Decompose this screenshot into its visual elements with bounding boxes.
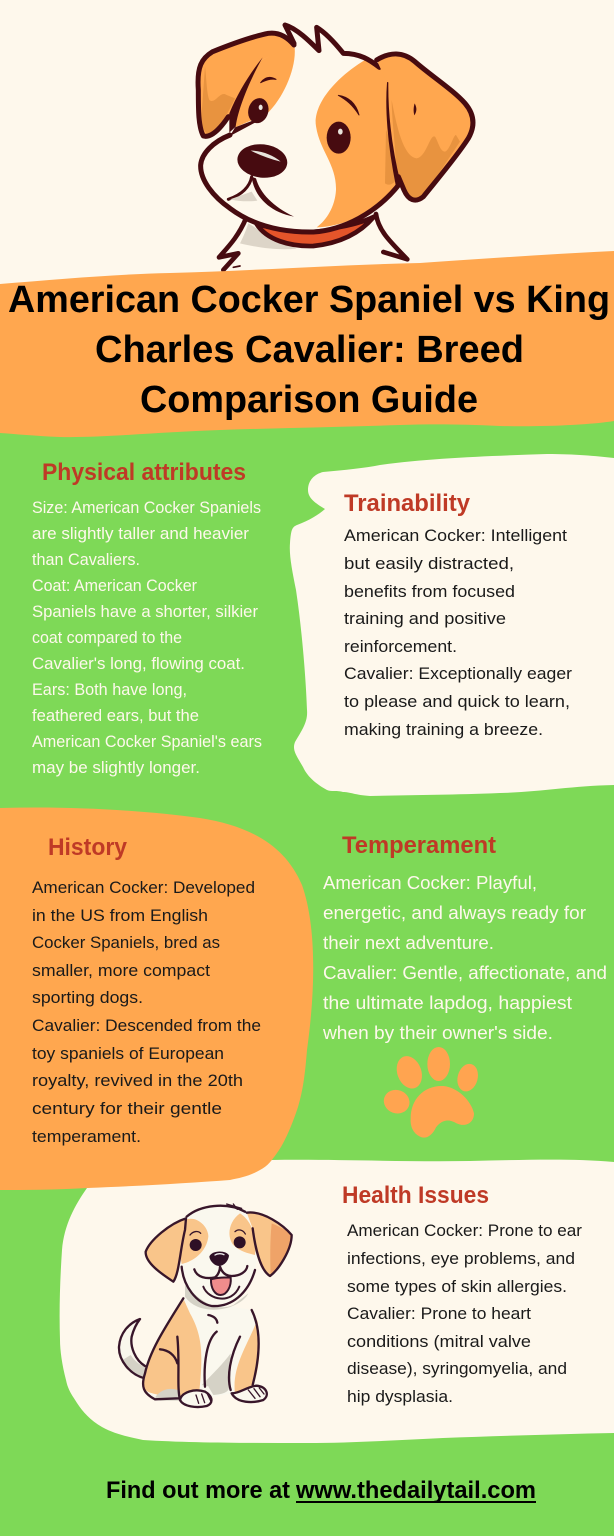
physical attributes text: Size: American Cocker Spaniels	[32, 498, 261, 517]
trainability text: to please and quick to learn,	[344, 692, 570, 711]
footer call to action	[106, 1477, 536, 1504]
puppy right ear	[247, 1212, 292, 1276]
history text: Cavalier: Descended from the	[32, 1016, 261, 1035]
history text: century for their gentle	[32, 1099, 222, 1118]
health issues text: some types of skin allergies.	[347, 1277, 567, 1296]
history blob	[0, 807, 313, 1190]
temperament text: their next adventure.	[323, 932, 494, 953]
dog collar	[257, 217, 374, 246]
health issues text: American Cocker: Prone to ear	[347, 1221, 582, 1240]
dog face patch right	[316, 60, 399, 227]
physical attributes text: may be slightly longer.	[32, 758, 200, 777]
title text	[8, 279, 610, 421]
dog face patch left	[235, 43, 295, 127]
title text: American Cocker Spaniel vs King	[8, 279, 610, 321]
title text: Charles Cavalier: Breed	[95, 329, 524, 371]
panel: history	[0, 807, 313, 1190]
icon: paw print	[380, 1047, 481, 1138]
temperament text: energetic, and always ready for	[323, 902, 586, 923]
trainability text: reinforcement.	[344, 637, 457, 656]
history text: royalty, revived in the 20th	[32, 1071, 243, 1090]
history text: sporting dogs.	[32, 988, 143, 1007]
dog chest and neck	[219, 213, 407, 273]
physical attributes text	[32, 498, 262, 777]
trainability text: making training a breeze.	[344, 720, 543, 739]
puppy face	[190, 1230, 247, 1299]
puppy body	[143, 1298, 267, 1405]
trainability text: benefits from focused	[344, 582, 515, 601]
dog eyebrow and eye right	[327, 95, 359, 154]
physical attributes text: Coat: American Cocker	[32, 576, 197, 595]
orange band shape	[0, 251, 614, 437]
puppy paws	[180, 1386, 267, 1407]
dog right ear	[377, 54, 473, 200]
puppy tail	[119, 1319, 145, 1378]
history text: in the US from English	[32, 906, 208, 925]
health issues text: disease), syringomyelia, and	[347, 1359, 567, 1378]
temperament text: Cavalier: Gentle, affectionate, and	[323, 962, 607, 983]
trainability text: training and positive	[344, 609, 506, 628]
temperament text: American Cocker: Playful,	[323, 872, 537, 893]
puppy left ear	[146, 1218, 186, 1282]
trainability text: Cavalier: Exceptionally eager	[344, 664, 572, 683]
physical attributes text: Spaniels have a shorter, silkier	[32, 602, 258, 621]
heading: trainability: Trainability	[344, 490, 471, 517]
physical attributes text: than Cavaliers.	[32, 550, 140, 569]
history text: Cocker Spaniels, bred as	[32, 933, 220, 952]
heading: temperament: Temperament	[342, 832, 496, 859]
history text: temperament.	[32, 1127, 141, 1146]
panel: health issues	[60, 1160, 614, 1443]
panel: physical attributes	[32, 459, 262, 777]
health issues text: hip dysplasia.	[347, 1387, 453, 1406]
heading: physical attributes: Physical attributes	[42, 459, 246, 486]
history text: American Cocker: Developed	[32, 878, 255, 897]
dog left ear	[198, 33, 294, 136]
health issues text: conditions (mitral valve	[347, 1332, 531, 1351]
temperament text: when by their owner's side.	[322, 1022, 553, 1043]
trainability text	[344, 526, 572, 739]
health issues text	[347, 1221, 582, 1406]
title band	[0, 251, 614, 437]
dog head outline	[201, 25, 400, 232]
illustration: dog head	[198, 25, 473, 273]
dog eye left	[245, 96, 271, 125]
physical attributes text: Cavalier's long, flowing coat.	[32, 654, 245, 673]
history text	[32, 878, 261, 1146]
footer call to action: www.thedailytail.com	[295, 1477, 536, 1504]
temperament text	[322, 872, 607, 1043]
heading: history: History	[48, 834, 128, 861]
header cream area	[0, 0, 614, 300]
trainability text: American Cocker: Intelligent	[344, 526, 567, 545]
footer call to action: Find out more at	[106, 1477, 290, 1504]
dog nose	[236, 142, 289, 180]
history text: toy spaniels of European	[32, 1044, 224, 1063]
physical attributes text: coat compared to the	[32, 628, 182, 647]
trainability text: but easily distracted,	[344, 554, 514, 573]
physical attributes text: Ears: Both have long,	[32, 680, 187, 699]
panel: temperament	[322, 832, 607, 1138]
history text: smaller, more compact	[32, 961, 210, 980]
title text: Comparison Guide	[140, 379, 478, 421]
health issues text: Cavalier: Prone to heart	[347, 1304, 531, 1323]
puppy head	[180, 1204, 257, 1310]
dog mouth	[228, 177, 294, 217]
illustration: sitting puppy	[119, 1204, 292, 1407]
dog head fill	[201, 25, 403, 230]
physical attributes text: feathered ears, but the	[32, 706, 199, 725]
temperament text: the ultimate lapdog, happiest	[323, 992, 572, 1013]
panel: trainability	[290, 454, 614, 796]
physical attributes text: are slightly taller and heavier	[32, 524, 249, 543]
health issues blob	[60, 1160, 614, 1443]
heading: health issues: Health Issues	[342, 1182, 489, 1209]
trainability blob	[290, 454, 614, 796]
physical attributes text: American Cocker Spaniel's ears	[32, 732, 262, 751]
health issues text: infections, eye problems, and	[347, 1249, 575, 1268]
